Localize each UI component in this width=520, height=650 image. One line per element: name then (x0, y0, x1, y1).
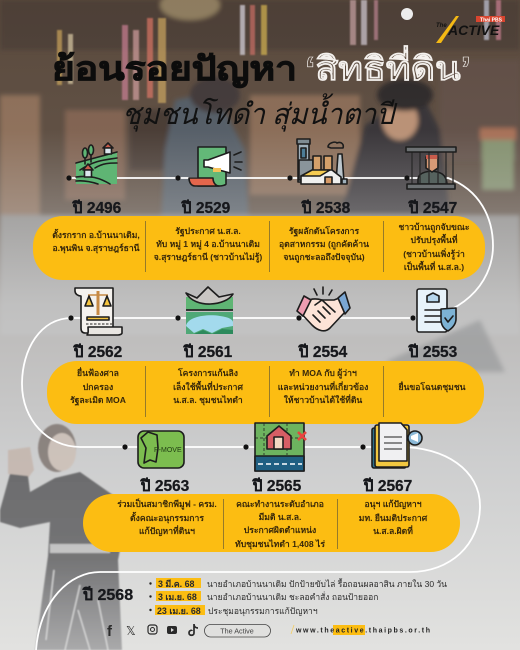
social handle pill: The Active (220, 626, 254, 636)
panel: row 1: ตั้งรกราก อ.บ้านนาเดิม, (52, 228, 140, 240)
panel: row 1: ทับ หมู่ 1 หมู่ 4 อ.บ้านนาเดิม (156, 239, 260, 250)
logo: The Active (436, 16, 505, 43)
panel: row 2: ยื่นขอโฉนดชุมชน (398, 380, 466, 393)
social handle pill (204, 624, 270, 637)
list: 2568 events: นายอำเภอบ้านนาเดิม ปักป้ายขับไล่ รื้อถอนผลอาสิน ภายใน 30 วัน (207, 578, 447, 589)
panel: row 3: ประกาศผิดตำแหน่ง (244, 525, 316, 535)
panel: row 1: ปรับปรุงพื้นที่ (410, 233, 458, 246)
icon: farmland (76, 143, 117, 184)
panel: row 1: อ.พุนพิน จ.สุราษฎร์ธานี (52, 243, 140, 254)
year labels: ปี 2565 (252, 477, 302, 495)
website url: www.theactive.thaipbs.or.th (295, 628, 430, 634)
list: 2568 events: 3 เม.ย. 68 (158, 592, 197, 602)
social icons (107, 623, 198, 640)
website url (291, 625, 430, 635)
list: 2568 events (149, 578, 447, 617)
logo: The Active: The (436, 23, 447, 29)
panel: row 3: แก้ปัญหาที่ดินฯ (139, 524, 195, 537)
year labels: ปี 2563 (140, 477, 190, 495)
year labels: ปี 2554 (298, 343, 348, 361)
panel: row 3: มท. ยืนมติประกาศ (359, 513, 428, 523)
panel: row 3: มีมติ น.ส.ล. (259, 512, 301, 522)
title: ‘สิทธิที่ดิน’ (305, 45, 471, 87)
icon: land title with shield (417, 289, 456, 332)
icon: megaphone announcement (189, 147, 242, 186)
year labels: ปี 2562 (73, 343, 122, 361)
list: 2568 events: นายอำเภอบ้านนาเดิม ชะลอคำสั่ง ถอนป้ายออก (207, 591, 378, 602)
panel: row 1: อุตสาหกรรม (ถูกคัดค้าน (279, 239, 369, 250)
year 2568 label: ปี 2568 (81, 585, 133, 604)
woman silhouette (0, 424, 122, 650)
title: ย้อนรอยปัญหา (52, 50, 297, 88)
year labels (72, 199, 458, 495)
list: 2568 events: 23 เม.ย. 68 (157, 606, 201, 616)
year labels: ปี 2496 (72, 199, 122, 217)
panel: row 2: ปกครอง (83, 382, 113, 392)
year labels: ปี 2547 (408, 199, 457, 217)
icon: mountain and lake (186, 287, 233, 334)
panel: row 2: ให้ชาวบ้านได้ใช้ที่ดิน (284, 393, 362, 405)
panel: row 1: รัฐผลักดันโครงการ (289, 225, 359, 237)
year labels: ปี 2529 (181, 199, 231, 217)
icon: factory (297, 139, 347, 184)
panel: row 1 (33, 216, 485, 280)
list: 2568 events: 3 มี.ค. 68 (158, 579, 195, 589)
panel: row 2: โครงการแก้นลิง (177, 367, 238, 378)
panel: row 2: รัฐละเมิด MOA (70, 395, 126, 406)
panel: row 1: จ.สุราษฎร์ธานี (ชาวบ้านไม่รู้) (154, 252, 262, 263)
title (52, 45, 471, 88)
icon: P-Move fist (138, 431, 184, 468)
timeline dots (66, 175, 416, 450)
panel: row 2: น.ส.ล. ชุมชนไทดำ (173, 395, 243, 406)
year labels: ปี 2538 (301, 199, 351, 217)
panel: row 1: รัฐประกาศ น.ส.ล. (175, 226, 241, 237)
panel: row 2: ทำ MOA กับ ผู้ว่าฯ (289, 368, 357, 379)
panel: row 3: ทับชุมชนไทดำ 1,408 ไร่ (235, 539, 325, 550)
social icons: 𝕏 (126, 624, 136, 638)
panel: row 3: ตั้งคณะอนุกรรมการ (130, 511, 204, 524)
tent and antler shape (385, 320, 505, 372)
panel: row 2: เล็งใช้พื้นที่ประกาศ (173, 380, 243, 392)
panel: row 3 (83, 494, 460, 552)
icon: P-Move fist: P-MOVE (154, 447, 182, 454)
icon: handshake (297, 287, 350, 331)
timeline path (22, 178, 493, 650)
social icons: f (107, 623, 113, 640)
icon: court document scales (75, 288, 122, 335)
panel: row 3: น.ส.ล.ผิดที่ (373, 524, 413, 536)
panel: row 3: อนุฯ แก้ปัญหาฯ (364, 499, 422, 510)
panel: row 1: เป็นพื้นที่ น.ส.ล.) (404, 260, 464, 272)
subtitle: ชุมชนโทดำ สุ่มน้ำตาปี (122, 93, 397, 132)
list: 2568 events: ประชุมอนุกรรมการแก้ปัญหาฯ (208, 606, 318, 617)
year labels: ปี 2561 (183, 343, 233, 361)
panel: row 1: จนถูกชะลอถึงปัจจุบัน) (283, 252, 365, 263)
panel: row 2 (47, 361, 484, 424)
panel: row 2: ยื่นฟ้องศาล (77, 366, 119, 378)
year labels: ปี 2553 (408, 343, 458, 361)
logo: The Active: ACTIVE (447, 22, 500, 38)
icon: documents with megaphone badge (372, 423, 422, 468)
panel: row 3: คณะทำงานระดับอำเภอ (236, 499, 324, 509)
panel: row 2: และหน่วยงานที่เกี่ยวข้อง (278, 380, 368, 392)
icon: land map with house (255, 423, 306, 471)
panel: row 1: ชาวบ้านถูกจับขณะ (398, 222, 470, 233)
panel: row 3: ร่วมเป็นสมาชิกพีมูฟ - ครม. (117, 497, 217, 510)
icon: jail bars (406, 147, 456, 189)
logo: The Active: Thai PBS (480, 18, 503, 24)
year labels: ปี 2567 (363, 477, 412, 495)
panel: row 1: (ชาวบ้านเพิ่งรู้ว่า (403, 247, 465, 260)
